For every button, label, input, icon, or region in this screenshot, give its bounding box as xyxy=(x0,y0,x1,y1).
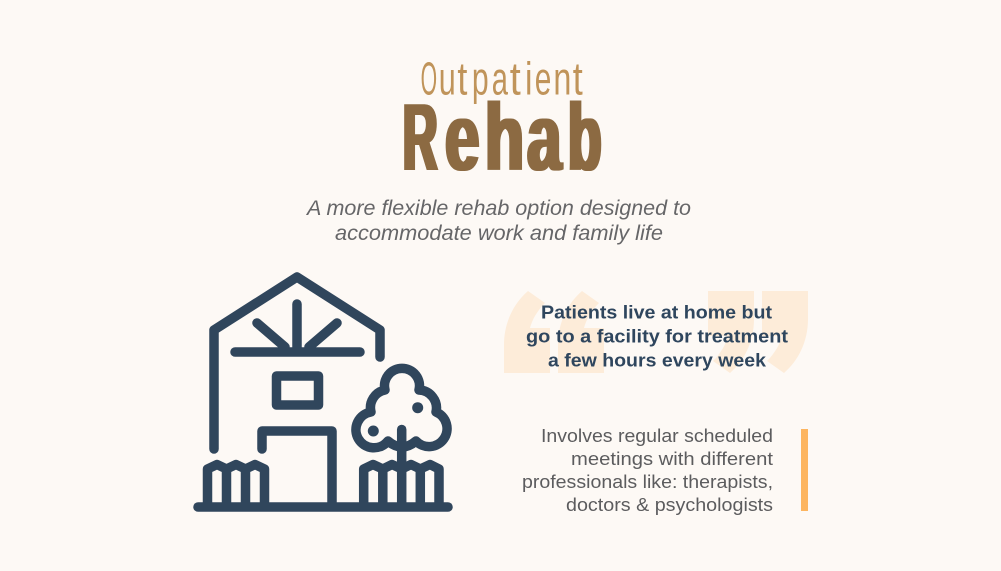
title line: Outpatient: a xyxy=(492,52,508,104)
title xyxy=(403,52,602,191)
icon part: ground line xyxy=(198,502,448,512)
icon part: house roof and walls xyxy=(214,277,380,449)
subtitle: A more flexible rehab option designed to xyxy=(305,196,691,220)
decorative quotation marks xyxy=(504,291,808,373)
title line: Rehab xyxy=(403,84,602,191)
title line: Outpatient: p xyxy=(472,52,489,104)
quote text xyxy=(526,302,788,370)
icon part: right fence xyxy=(364,464,439,506)
quote text: Patients live at home but xyxy=(541,302,772,322)
title line: Rehab: h xyxy=(485,84,524,191)
title line: Rehab: e xyxy=(445,84,479,191)
icon part: tree crown xyxy=(356,368,447,448)
icon part: fruit left xyxy=(368,426,379,436)
title line: Outpatient: e xyxy=(535,52,551,104)
title line: Outpatient xyxy=(421,52,583,104)
icon part: door xyxy=(262,431,332,506)
quote text: a few hours every week xyxy=(548,350,767,370)
quote text: go to a facility for treatment xyxy=(526,326,788,346)
subtitle: accommodate work and family life xyxy=(335,221,663,245)
title line: Outpatient: n xyxy=(553,52,571,104)
description text: meetings with different xyxy=(571,448,773,469)
description text: professionals like: therapists, xyxy=(522,471,773,492)
title line: Outpatient: t xyxy=(457,52,468,104)
closing quote xyxy=(708,291,808,373)
icon part: left fence xyxy=(208,464,264,506)
title line: Outpatient: i xyxy=(525,52,532,104)
description text xyxy=(522,425,773,515)
description text: Involves regular scheduled xyxy=(541,425,773,446)
opening quote xyxy=(504,291,604,373)
title line: Rehab: R xyxy=(403,84,437,191)
icon part: fruit right xyxy=(412,402,423,413)
title line: Rehab: b xyxy=(568,84,602,191)
accent bar xyxy=(801,429,808,511)
title line: Outpatient: t xyxy=(510,52,521,104)
title line: Outpatient: t xyxy=(573,52,583,104)
icon part: roof beam and rays xyxy=(235,304,360,352)
title line: Outpatient: u xyxy=(439,52,456,104)
title line: Rehab: a xyxy=(527,84,562,191)
description text: doctors & psychologists xyxy=(566,494,773,515)
title line: Outpatient: O xyxy=(421,52,437,104)
icon: house with tree and fences xyxy=(198,277,448,507)
subtitle xyxy=(305,196,691,245)
icon part: window xyxy=(276,376,318,405)
icon part: tree trunk xyxy=(397,430,406,505)
